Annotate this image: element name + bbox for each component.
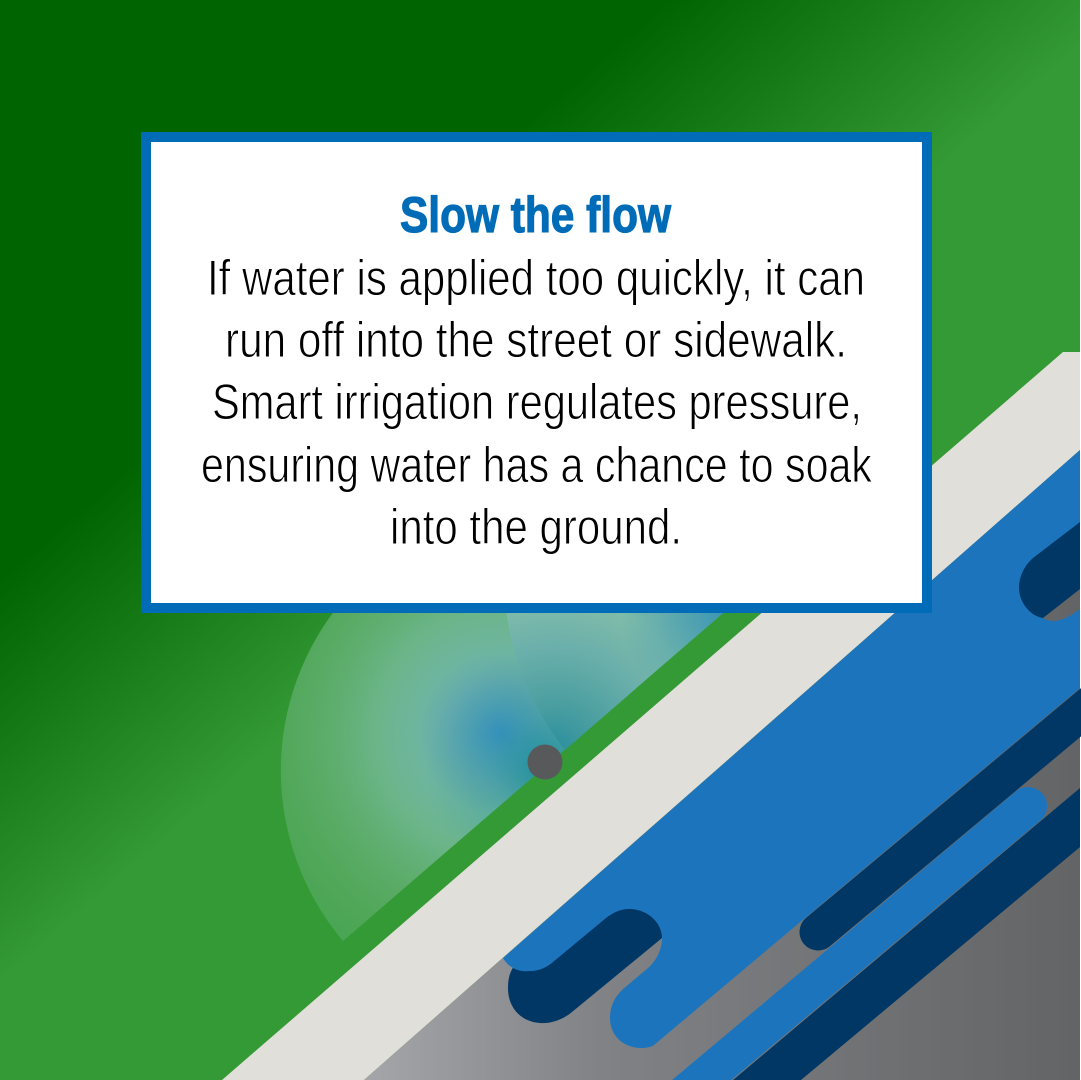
- navy water stream: upper pill: [818, 688, 1081, 932]
- navy water drip: right edge: [1000, 510, 1080, 625]
- body text: [201, 250, 873, 555]
- main runoff water body: [503, 450, 1080, 1048]
- body text: run off into the street or sidewalk.: [225, 312, 847, 368]
- spray: core near the nozzle: [455, 681, 564, 828]
- street: [364, 450, 1080, 1080]
- spray: inner overlapping arc: [506, 613, 723, 750]
- heading: Slow the flow: [400, 187, 671, 243]
- text panel: [146, 137, 927, 608]
- body text: Smart irrigation regulates pressure,: [212, 374, 862, 430]
- body text: If water is applied too quickly, it can: [207, 250, 865, 306]
- body text: into the ground.: [390, 499, 682, 555]
- spray: wide arc: [281, 600, 738, 941]
- panel frame: [146, 137, 927, 608]
- water spray from sprinkler: [280, 613, 723, 941]
- navy water stream: lower band: [733, 788, 1080, 1080]
- sprinkler head: [528, 744, 562, 780]
- body text: ensuring water has a chance to soak: [201, 437, 873, 493]
- sidewalk: [222, 352, 1080, 1080]
- runoff water on the street: [503, 450, 1081, 1080]
- light blue water stream: [660, 806, 1028, 1080]
- navy water drip: lower left: [508, 880, 680, 1023]
